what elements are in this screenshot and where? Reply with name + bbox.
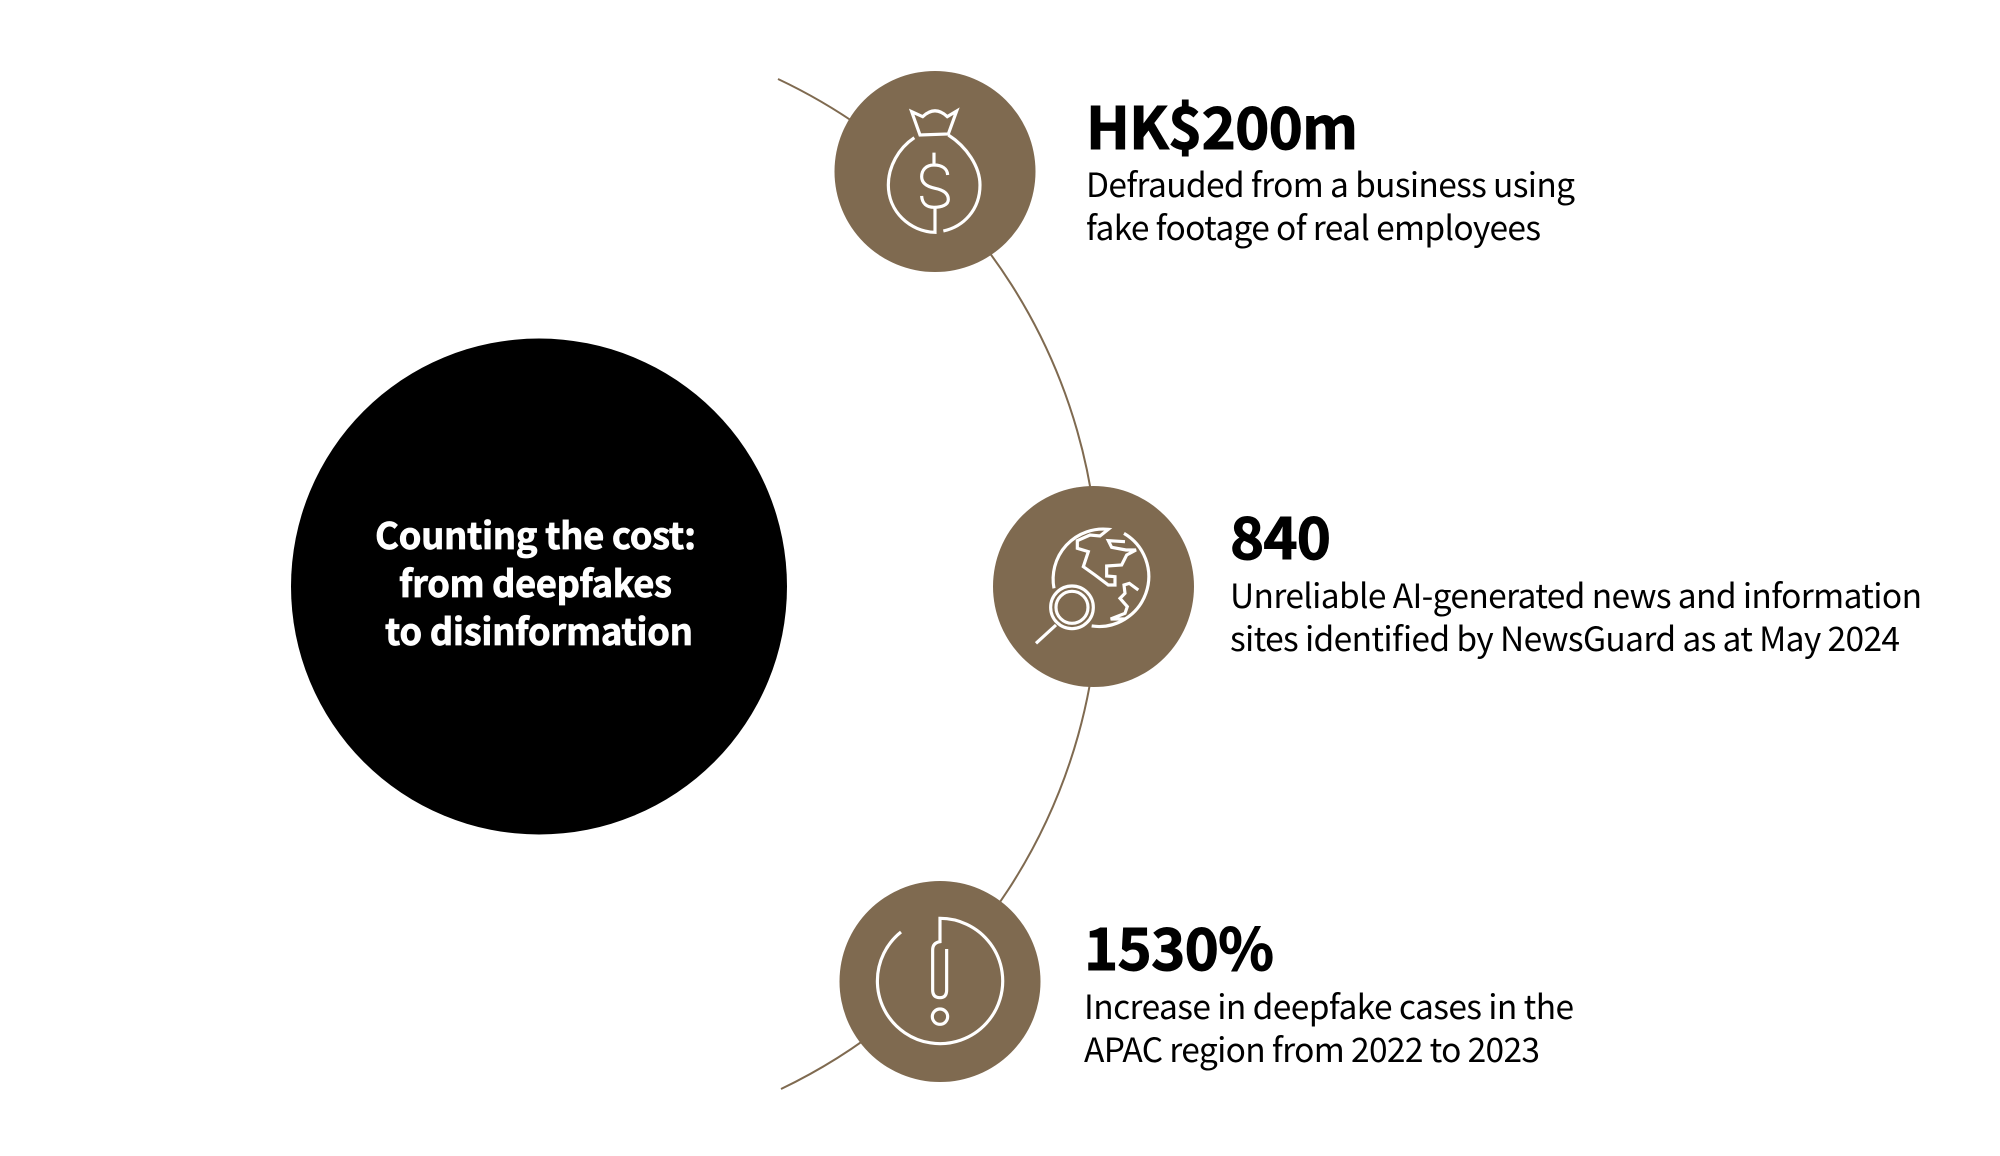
icon: exclamation mark in brown circle <box>840 881 1040 1082</box>
central circle with title <box>291 338 787 834</box>
title <box>375 507 696 656</box>
connecting arc <box>778 79 1099 1089</box>
stat: 1530% <box>1084 903 1574 1072</box>
stat: HK$200m <box>1086 82 1575 250</box>
icon: globe and magnifier in brown circle <box>993 486 1194 687</box>
title: from deepfakes <box>399 555 672 608</box>
stat: HK$200m: HK$200m <box>1086 82 1358 166</box>
stat: 840: sites identified by NewsGuard as at May 2024 <box>1230 612 1900 661</box>
icon: money bag in brown circle <box>834 71 1036 272</box>
stat: HK$200m: fake footage of real employees <box>1086 201 1541 250</box>
stat: 1530%: 1530% <box>1084 903 1274 987</box>
stat: 1530%: Increase in deepfake cases in the <box>1084 980 1574 1029</box>
stat: 840: 840 <box>1230 492 1331 576</box>
stat: 1530%: APAC region from 2022 to 2023 <box>1084 1023 1540 1072</box>
title: to disinformation <box>385 603 693 656</box>
stat: 840: Unreliable AI-generated news and information <box>1230 569 1922 618</box>
stat: 840 <box>1230 492 1922 661</box>
title: Counting the cost: <box>375 507 696 560</box>
stat: HK$200m: Defrauded from a business using <box>1086 158 1575 207</box>
